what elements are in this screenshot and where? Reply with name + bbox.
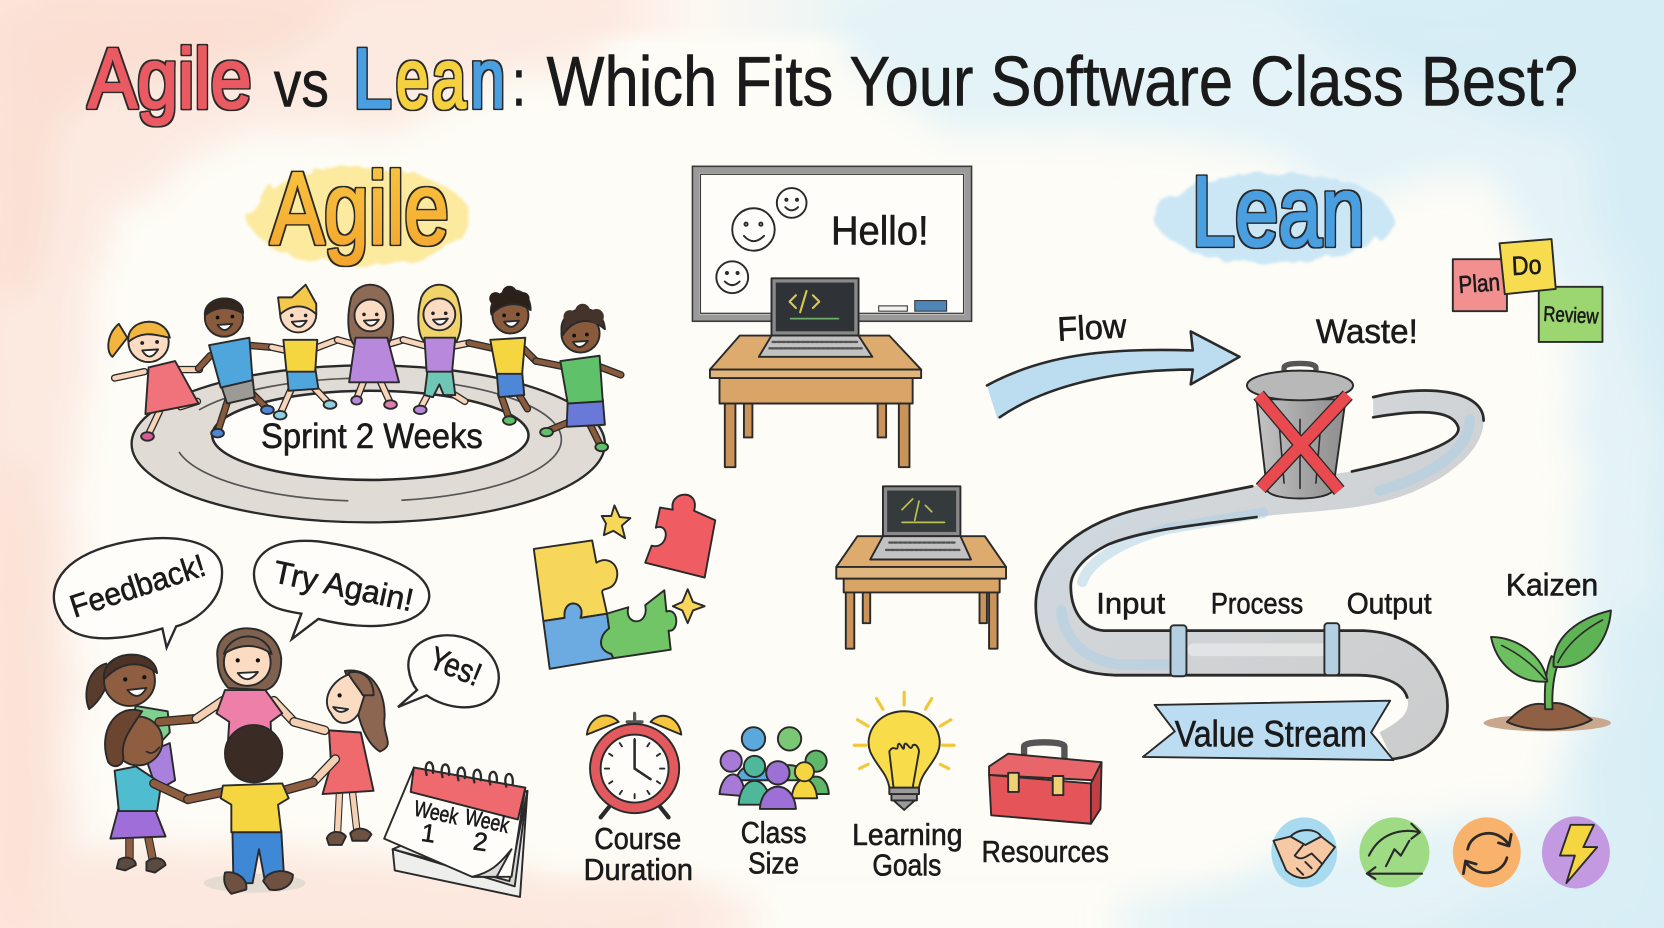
title: vs: [274, 46, 329, 120]
blue piece: [543, 604, 613, 669]
yellow piece: [534, 540, 617, 621]
label: class size: [741, 815, 807, 881]
kid 5 purple shirt: [403, 285, 469, 414]
title: [88, 30, 1578, 125]
speech bubble: Yes: Yes!: [424, 639, 487, 693]
note: review: [1539, 287, 1602, 342]
title: :: [512, 45, 526, 119]
kaizen sprout: Kaizen: [1506, 567, 1598, 603]
calendar: 1: [419, 819, 437, 849]
kid 2 blue shirt: [198, 298, 274, 437]
ground shadows: [204, 874, 306, 893]
speech bubble: Try Again: [254, 541, 429, 639]
label: course duration: Course: [594, 821, 681, 856]
large desk with laptop: [710, 278, 921, 467]
marker and eraser tray: [879, 306, 907, 311]
stars: [602, 505, 630, 538]
label: course duration: Duration: [584, 852, 693, 887]
value stream pipe: Process: [1211, 588, 1303, 621]
banner: value stream: Value Stream: [1175, 712, 1367, 754]
note: do: Do: [1511, 250, 1542, 281]
value stream pipe: [1036, 390, 1484, 759]
calendar: [384, 762, 527, 897]
banner: value stream: [1143, 701, 1393, 760]
icon: lightning bolt: [1542, 816, 1610, 888]
label: learning goals: Goals: [872, 848, 941, 883]
green piece: [601, 590, 676, 658]
child: pink shirt: [196, 628, 294, 756]
kid 7 green shirt: [536, 304, 621, 451]
label: learning goals: Learning: [852, 817, 963, 852]
icon: toolbox: [989, 742, 1102, 824]
child: green shirt ponytail: [86, 655, 196, 791]
kid 4 purple dress: [337, 285, 403, 409]
title: L: [353, 30, 392, 125]
note: review: Review: [1543, 303, 1600, 329]
trash can with red cross: [1247, 313, 1418, 498]
kaizen sprout: [1484, 567, 1611, 731]
sticky notes: [1453, 239, 1602, 342]
label: learning goals: [852, 817, 963, 883]
child: curly hair teal shirt: [105, 710, 188, 873]
speech bubble: Feedback: Feedback!: [65, 547, 210, 625]
icon: handshake: [1271, 817, 1337, 887]
red piece: [645, 495, 715, 578]
title: a: [432, 30, 466, 125]
whiteboard: Hello!: [831, 207, 929, 253]
calendar: 2: [471, 827, 489, 857]
label: class size: Size: [748, 846, 799, 881]
note: do: [1500, 239, 1556, 294]
label: course duration: [584, 821, 693, 887]
kid 1 pink dress: [108, 322, 200, 441]
kid 3 yellow shirt: [272, 285, 337, 419]
sprint track: Sprint 2 Weeks: [261, 417, 483, 456]
calendar: Week: [463, 804, 512, 838]
icon: growth chart: [1359, 817, 1429, 887]
laptop: [772, 278, 859, 336]
Agile heading: Agile: [271, 151, 449, 265]
arrow: flow: Flow: [1056, 307, 1128, 349]
small desk with laptop: [836, 486, 1006, 649]
laptop: [883, 486, 960, 536]
sprint track: [132, 365, 605, 522]
value stream pipe: Output: [1347, 588, 1432, 621]
calendar: Week: [412, 796, 461, 830]
label: resources: Resources: [982, 834, 1109, 869]
title: e: [396, 30, 429, 125]
speech bubble: Try Again: Try Again!: [270, 553, 417, 618]
title: n: [470, 30, 505, 125]
pipe labels: Input: [1096, 588, 1166, 621]
note: plan: Plan: [1458, 269, 1501, 299]
pipe couplings: [1171, 625, 1186, 676]
Lean heading: Lean: [1192, 156, 1365, 267]
children holding hands around the sprint: [108, 285, 621, 451]
puzzle: [534, 495, 715, 669]
child: red dress: [294, 671, 388, 845]
trash can with red cross: Waste!: [1316, 313, 1418, 351]
child: yellow shirt back view: [188, 725, 313, 894]
icon: light bulb: [854, 692, 954, 810]
speech bubble: Feedback: [54, 538, 222, 648]
note: plan: [1453, 259, 1507, 311]
speech bubble: Yes: [398, 635, 499, 707]
whiteboard: [692, 166, 972, 321]
kid 6 yellow shirt: [469, 286, 536, 425]
icon: class group: [720, 727, 829, 809]
icon: refresh cycle: [1453, 817, 1521, 887]
children in a feedback circle: [86, 628, 388, 894]
smiley faces: [716, 188, 807, 293]
icon: alarm clock: [587, 713, 681, 817]
label: class size: Class: [741, 815, 807, 850]
arrow: flow: [987, 307, 1240, 419]
title: Agile: [88, 30, 252, 125]
